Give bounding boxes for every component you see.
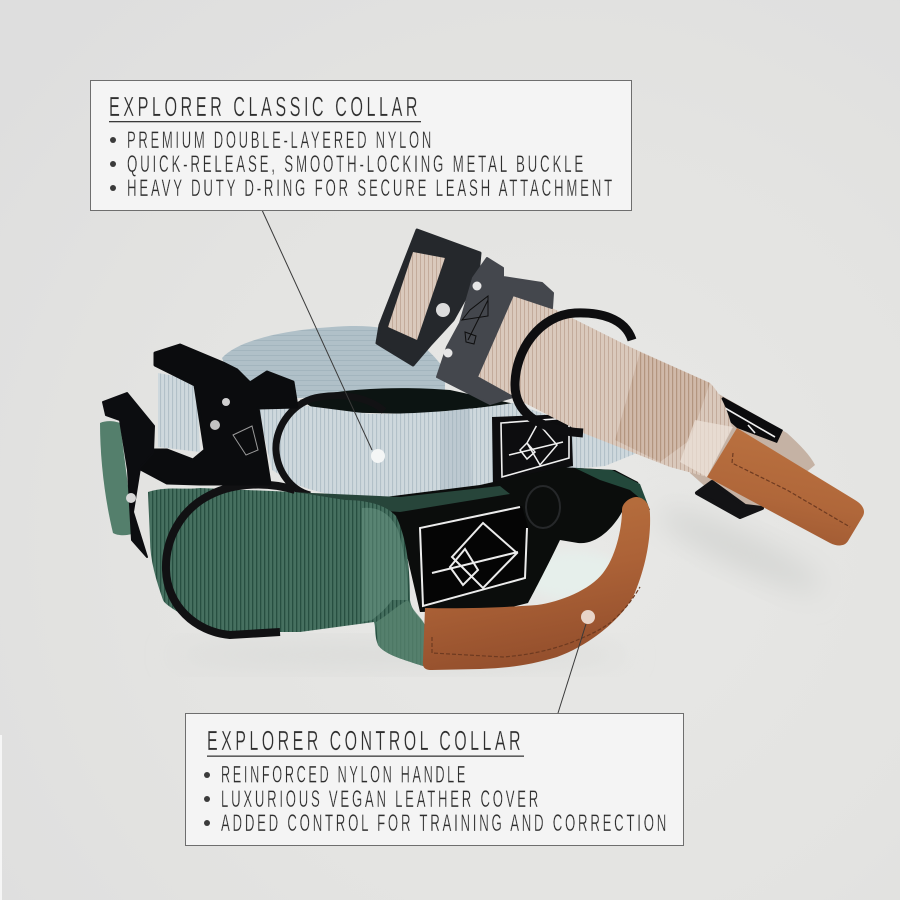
grey collar shaded stripes — [440, 408, 472, 496]
white edge strip — [0, 735, 2, 900]
explorer classic collar, grey, stacked middle — [158, 326, 637, 498]
green edge on black section — [575, 468, 648, 505]
grey collar dark inner — [300, 388, 515, 414]
explorer control collar, green, bottom — [100, 421, 650, 670]
green collar top edge — [290, 486, 510, 512]
bullet list: REINFORCED NYLON HANDLE — [221, 762, 468, 788]
callout pointer: control collar — [558, 610, 595, 713]
green strap light fold — [362, 508, 408, 622]
heading: EXPLORER CONTROL COLLAR — [207, 725, 524, 756]
green collar left end — [100, 421, 134, 535]
tan strap dark seam band — [615, 352, 710, 462]
soft shadows — [170, 497, 828, 665]
tan buckle right part — [437, 258, 553, 404]
bullet list: PREMIUM DOUBLE-LAYERED NYLON — [127, 127, 434, 154]
green collar strap — [148, 488, 426, 667]
grey collar black patch — [492, 414, 573, 484]
tan collar d-ring — [515, 313, 632, 433]
green collar black section — [385, 467, 650, 612]
bullet list: LUXURIOUS VEGAN LEATHER COVER — [221, 786, 541, 813]
tan leather handle — [707, 428, 864, 545]
black buckle of lower collars — [103, 345, 297, 557]
grey collar strip at buckle — [158, 373, 200, 452]
tan collar logo patch — [713, 397, 783, 443]
panel: explorer classic collar — [90, 80, 632, 210]
explorer tan collar, top right — [377, 230, 864, 545]
tan collar rear hardware — [697, 482, 762, 517]
bullet list — [204, 762, 669, 837]
control leather handle — [423, 497, 650, 670]
tan strap light end — [680, 420, 733, 477]
callout pointer: classic collar — [262, 210, 385, 463]
bullet list — [110, 127, 615, 202]
panel: explorer control collar — [186, 714, 684, 846]
tan buckle left part — [377, 230, 480, 365]
tan collar back band — [690, 393, 815, 510]
small rear d-ring — [526, 486, 560, 528]
heading underline — [109, 121, 421, 122]
green collar logo patch — [420, 506, 528, 607]
tan collar strap — [477, 295, 732, 477]
grey collar back band — [222, 326, 445, 400]
green collar d-ring — [166, 485, 295, 635]
heading underline — [207, 756, 524, 757]
grey collar d-ring — [276, 396, 384, 495]
green strap handle loop — [376, 600, 426, 667]
grey collar front band — [258, 403, 637, 498]
heading: EXPLORER CLASSIC COLLAR — [109, 91, 421, 122]
